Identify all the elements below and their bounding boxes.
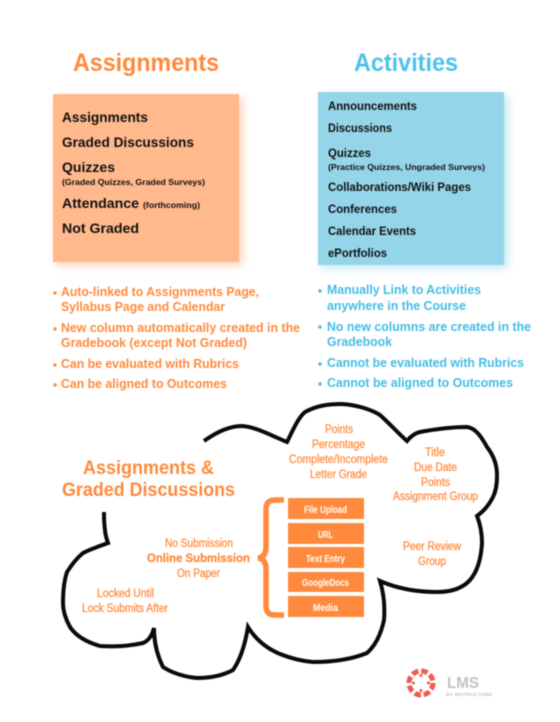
text block: assignment properties: Can be aligned to Outcomes (61, 377, 227, 391)
option: URL: URL (318, 530, 333, 541)
text block: grading types: Points (325, 424, 353, 436)
text block: assignment fields: Title (425, 447, 445, 459)
item: Collaborations: Collaborations/Wiki Pages (328, 182, 471, 194)
text block: submission types (147, 538, 250, 580)
item: Calendar Events: Calendar Events (328, 226, 416, 238)
text block: activity properties: Manually Link to Activities (327, 283, 481, 297)
icon: logo mark (409, 671, 433, 695)
brace (258, 500, 284, 615)
text block: assignment fields: Due Date (414, 462, 457, 474)
text block: assignment fields (393, 447, 478, 503)
text block: lock dates (82, 588, 168, 615)
heading: Assignments & Graded Discussions: Graded Discussions (62, 480, 235, 501)
text block: activity properties: anywhere in the Course (327, 299, 466, 313)
text block: activity properties (318, 283, 531, 390)
text block: assignment properties: Gradebook (except Not Graded) (61, 336, 247, 350)
text block: submission types: Online Submission (147, 553, 250, 565)
panel: activity types (318, 92, 508, 268)
text block: submission types: No Submission (165, 538, 233, 550)
text block: assignment fields: Points (421, 477, 450, 489)
text block: activity properties: Cannot be aligned to Outcomes (327, 376, 513, 390)
text block: activity properties: No new columns are created in the (327, 320, 531, 334)
option: GoogleDocs: GoogleDocs (302, 578, 349, 589)
text block: assignment properties: New column automatically created in the (61, 321, 300, 335)
text block: assignment properties (53, 285, 300, 391)
item: Announcements: Announcements (328, 101, 417, 113)
text block: peer review: Group (418, 556, 446, 568)
text block: activity properties: Gradebook (327, 335, 392, 349)
text block: grading types: Letter Grade (310, 469, 367, 481)
text block: assignment properties: Auto-linked to Assignments Page, (61, 285, 259, 299)
heading: Assignments: Assignments (73, 49, 219, 77)
text block: lock dates: Lock Submits After (82, 603, 168, 615)
option: Text Entry: Text Entry (306, 554, 345, 565)
item: Quizzes note: (Practice Quizzes, Ungraded Surveys) (328, 163, 485, 172)
text block: peer review (403, 541, 462, 568)
online submission options (288, 498, 364, 617)
item: Conferences: Conferences (328, 204, 397, 216)
option: File Upload: File Upload (304, 505, 347, 516)
heading: Assignments & Graded Discussions: Assignments & (83, 458, 214, 479)
logo: LMS by Instructure (409, 671, 492, 697)
text block: grading types (289, 424, 388, 481)
item: Discussions: Discussions (328, 123, 392, 135)
text block: assignment fields: Assignment Group (393, 491, 478, 503)
item: Quizzes note: (Graded Quizzes, Graded Surveys) (62, 177, 205, 187)
heading: Activities: Activities (354, 49, 458, 77)
text block: assignment properties: Syllabus Page and Calendar (61, 300, 225, 314)
item: Quizzes: Quizzes (62, 159, 115, 175)
text block: peer review: Peer Review (403, 541, 462, 553)
cloud outline (63, 404, 497, 678)
item: forthcoming note: (forthcoming) (143, 200, 200, 210)
text block: submission types: On Paper (177, 568, 220, 580)
item: Assignments: Assignments (62, 109, 148, 125)
item: ePortfolios: ePortfolios (328, 248, 387, 260)
text block: grading types: Percentage (312, 439, 365, 451)
text block: lock dates: Locked Until (97, 588, 154, 600)
text block: activity properties: Cannot be evaluated with Rubrics (327, 356, 524, 370)
option: Media: Media (313, 603, 338, 614)
logo tagline: BY INSTRUCTURE (446, 692, 492, 697)
item: Attendance: Attendance (62, 195, 139, 211)
item: Quizzes: Quizzes (328, 148, 371, 160)
logo wordmark: LMS (447, 675, 479, 692)
item: Graded Discussions: Graded Discussions (62, 134, 194, 150)
panel: assignment types (53, 94, 243, 266)
item: Not Graded: Not Graded (62, 220, 139, 236)
text block: grading types: Complete/Incomplete (289, 454, 388, 466)
heading: Assignments & Graded Discussions (62, 458, 235, 501)
text block: assignment properties: Can be evaluated with Rubrics (61, 357, 239, 371)
